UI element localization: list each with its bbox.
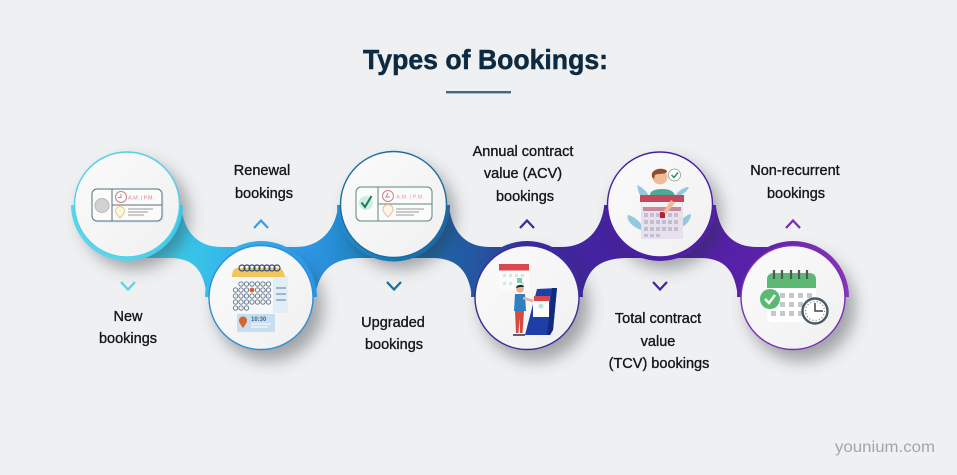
ribbon connector [128, 207, 793, 297]
label: non-recurrent bookings: bookings [767, 186, 825, 202]
icon: calendar with clock [760, 270, 828, 324]
label: new bookings: bookings [99, 331, 157, 347]
icon: confirmed card: A.M. | P.M. [396, 194, 424, 200]
label: total contract value bookings [609, 311, 709, 372]
label: annual contract value bookings: value (ACV) [484, 166, 562, 182]
label: non-recurrent bookings [750, 163, 840, 202]
icon: calendar with rings: 10:30 [251, 317, 267, 323]
icon: booking card: A.M. | P.M. [128, 196, 154, 202]
label: annual contract value bookings [473, 144, 573, 205]
chevron: tcv [653, 282, 667, 290]
label: total contract value bookings: (TCV) bookings [609, 356, 709, 372]
step 1: new bookings circle [71, 152, 183, 261]
label: annual contract value bookings: Annual contract [473, 144, 573, 160]
shadow: circles [81, 161, 855, 361]
step 6: non-recurrent bookings circle [737, 241, 849, 350]
chevron: non-recurrent [786, 220, 800, 228]
chevron: upgraded [387, 282, 401, 290]
title underline [446, 91, 511, 93]
label: upgraded bookings: bookings [365, 337, 423, 353]
label: annual contract value bookings: bookings [496, 189, 554, 205]
label: new bookings [99, 309, 157, 347]
label: upgraded bookings [361, 315, 425, 353]
step 5: total contract value circle [604, 152, 716, 261]
watermark: younium.com [835, 439, 935, 456]
label: upgraded bookings: Upgraded [361, 315, 425, 331]
icon: person at kiosk [499, 264, 557, 335]
label: total contract value bookings: value [641, 334, 675, 350]
icon: person with calendar [628, 169, 691, 239]
chevron: acv [520, 220, 534, 228]
step 3: upgraded bookings circle [337, 152, 450, 262]
chevron: renewal [254, 220, 268, 228]
step 4: annual contract value circle [471, 241, 583, 350]
label: renewal bookings [234, 163, 293, 202]
step 2: renewal bookings circle [205, 241, 317, 350]
label: new bookings: New [113, 309, 143, 325]
label: renewal bookings: Renewal [234, 163, 290, 179]
title: Types of Bookings: [363, 44, 608, 75]
label: total contract value bookings: Total contract [615, 311, 701, 327]
label: renewal bookings: bookings [235, 186, 293, 202]
chevron: new [121, 282, 135, 290]
label: non-recurrent bookings: Non-recurrent [750, 163, 840, 179]
